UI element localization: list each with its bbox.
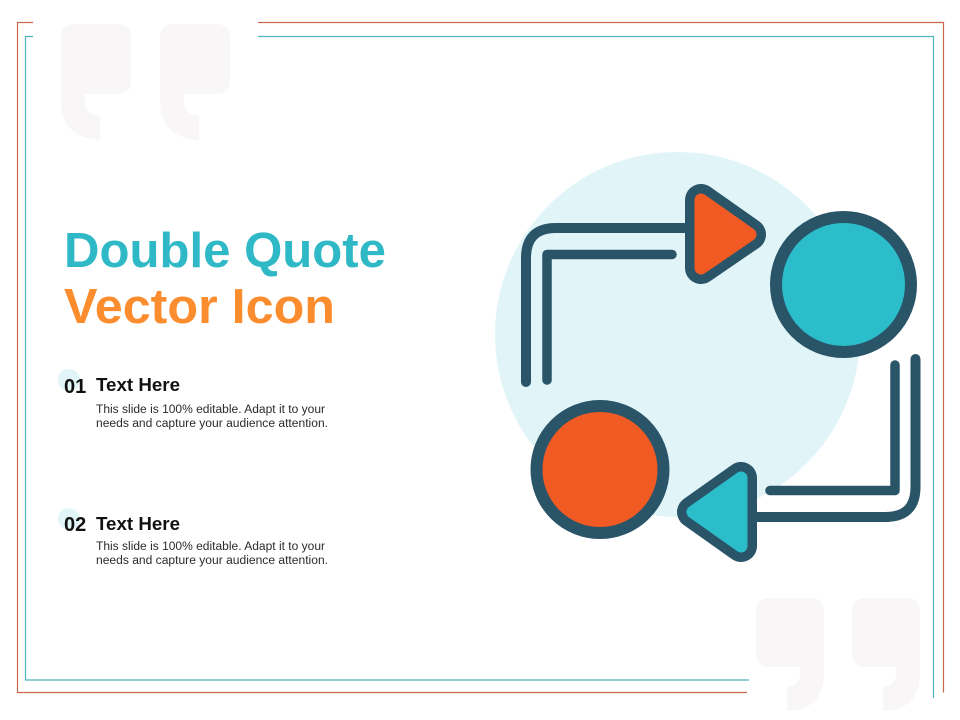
icon: cycle arrow bottom	[693, 359, 916, 546]
icon: closing double quote	[756, 598, 920, 711]
heading 02: Text Here	[96, 514, 180, 534]
icon: opening double quote	[61, 24, 230, 140]
item 01	[58, 369, 328, 430]
number badge 01	[58, 369, 86, 398]
body text 02: needs and capture your audience attention.	[96, 555, 328, 567]
heading 01: Text Here	[96, 375, 180, 395]
body text 01	[96, 404, 328, 430]
title: Double Quote	[64, 224, 386, 278]
body text 01: needs and capture your audience attention.	[96, 418, 328, 430]
number badge 01: 01	[64, 376, 86, 398]
background circle	[495, 152, 860, 517]
title: Vector Icon	[64, 280, 335, 334]
body text 02: This slide is 100% editable. Adapt it to your	[96, 541, 325, 553]
body text 01: This slide is 100% editable. Adapt it to your	[96, 404, 325, 416]
number badge 02: 02	[64, 514, 86, 536]
icon: teal circle	[776, 217, 911, 352]
number badge 02	[58, 508, 86, 536]
item 02	[58, 508, 328, 567]
title	[64, 224, 386, 334]
icon: orange circle	[536, 406, 664, 533]
icon: cycle arrow top	[526, 200, 750, 382]
body text 02	[96, 541, 328, 567]
